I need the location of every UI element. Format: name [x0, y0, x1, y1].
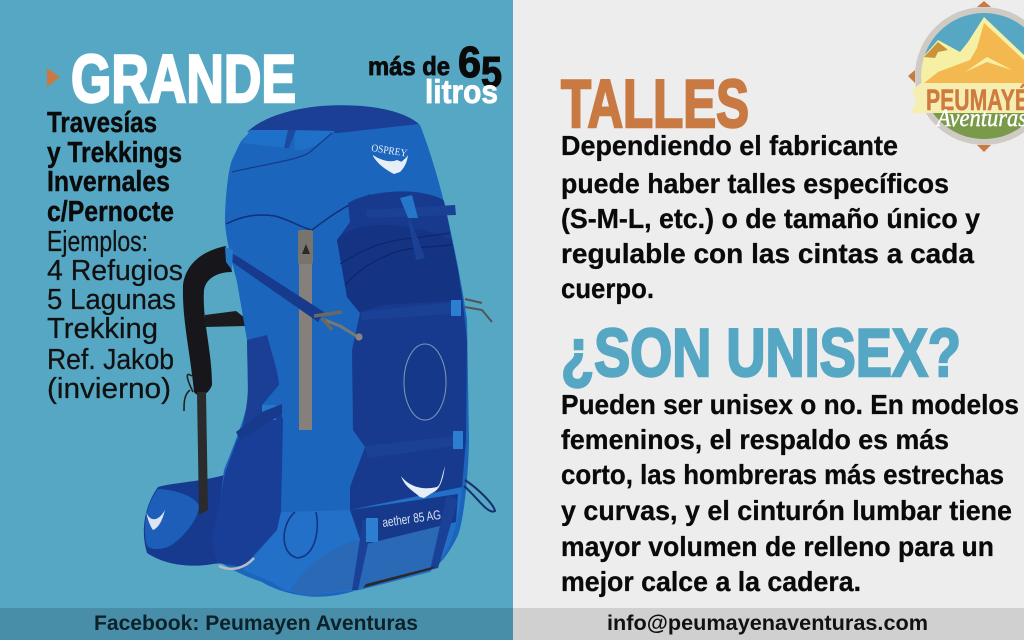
backpack: front navy pocket	[337, 191, 467, 510]
backpack: main body	[214, 105, 469, 597]
footer text: Facebook: Facebook: Peumayen Aventuras	[94, 612, 418, 635]
backpack: hip belt logo	[146, 510, 165, 530]
backpack: diagonal strap and cord lock	[225, 247, 363, 341]
text block: trip types: Invernales	[47, 166, 170, 198]
capacity label: más de 65 litros: 5	[481, 48, 502, 97]
text block: unisex explanation: femeninos, el respaldo es más	[561, 424, 949, 455]
text block: examples: Trekking	[47, 313, 158, 345]
text block: trip types: Travesías	[47, 107, 157, 139]
text block: unisex explanation	[561, 389, 1019, 597]
text block: sizes explanation: cuerpo.	[561, 273, 654, 304]
text block: examples: Ejemplos:	[47, 226, 148, 258]
backpack: Osprey lid logo	[371, 143, 408, 174]
panel: left blue background	[0, 0, 513, 640]
title: GRANDE with arrow marker: GRANDE	[71, 41, 296, 117]
text block: examples: 4 Refugios	[47, 255, 183, 287]
backpack: Osprey lid logo: OSPREY	[371, 143, 408, 160]
text block: unisex explanation: mejor calce a la cadera.	[561, 566, 861, 597]
text block: unisex explanation: mayor volumen de relleno para un	[561, 531, 994, 562]
heading: TALLES: TALLES	[561, 66, 749, 142]
text block: examples: (invierno)	[47, 373, 171, 405]
text block: sizes explanation: (S-M-L, etc.) o de tamaño único y	[561, 203, 980, 234]
backpack: horizontal straps with buckles	[361, 195, 492, 458]
text block: examples	[47, 226, 183, 405]
capacity label: más de 65 litros: más de	[368, 51, 450, 81]
backpack: lower side mesh pocket	[212, 404, 283, 567]
text block: unisex explanation: y curvas, y el cinturón lumbar tiene	[561, 495, 1012, 526]
logo: Peumayen Aventuras badge	[908, 1, 1024, 152]
text block: trip types: c/Pernocte	[47, 196, 174, 228]
capacity label: más de 65 litros	[368, 38, 502, 110]
backpack: lower wing logo	[401, 466, 445, 498]
backpack: side grey compression strap	[298, 230, 313, 430]
footer bar: left	[0, 608, 513, 640]
illustration: blue Osprey backpack	[144, 105, 495, 597]
backpack: hip belt	[144, 472, 245, 566]
text block: sizes explanation: Dependiendo el fabricante	[561, 130, 898, 161]
backpack: oval outline patch	[404, 344, 446, 420]
text block: trip types	[47, 107, 182, 228]
backpack: shoulder strap mesh	[183, 246, 245, 515]
text block: examples: Ref. Jakob	[47, 344, 174, 376]
text block: sizes explanation: regulable con las cintas a cada	[561, 238, 974, 269]
backpack: left dark side panel	[240, 335, 279, 436]
text block: examples: 5 Lagunas	[47, 284, 176, 316]
panel: right grey background	[513, 0, 1024, 640]
text block: sizes explanation: puede haber talles específicos	[561, 168, 949, 199]
text block: sizes explanation	[561, 130, 980, 304]
backpack: top lid	[247, 106, 419, 133]
text block: trip types: y Trekkings	[47, 137, 182, 169]
capacity label: más de 65 litros: litros	[425, 73, 498, 110]
capacity label: más de 65 litros: 6	[458, 38, 481, 87]
backpack: model label aether 85 AG: aether 85 AG	[381, 507, 442, 530]
backpack: lower front panel	[219, 480, 495, 596]
footer text: email: info@peumayenaventuras.com	[607, 612, 928, 635]
footer bar: right	[513, 608, 1024, 640]
